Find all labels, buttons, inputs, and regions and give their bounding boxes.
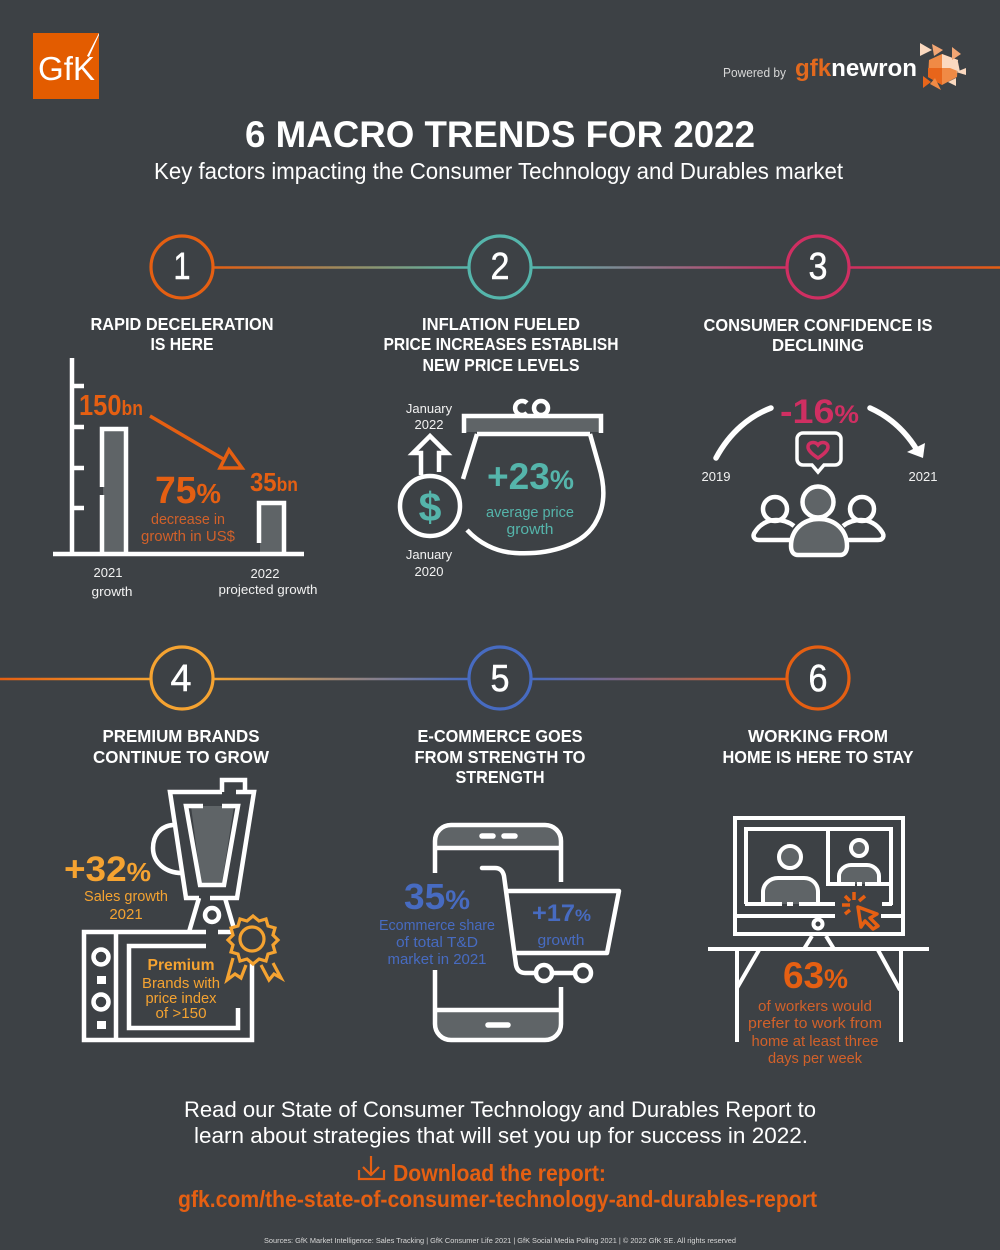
icon: purse with dollar coin: January xyxy=(406,547,453,562)
heading 3: CONSUMER CONFIDENCE IS xyxy=(704,315,932,335)
title: 6 MACRO TRENDS FOR 2022 xyxy=(245,114,755,155)
text: premium definition: of >150 xyxy=(156,1005,206,1022)
icon: purse with dollar coin: average price xyxy=(486,504,574,521)
icon: purse with dollar coin: 2022 xyxy=(415,417,443,432)
number badge 3: 3 xyxy=(808,246,828,288)
icon: confidence arc and people: 2021 xyxy=(909,469,937,484)
number badge 1 xyxy=(151,236,213,298)
icon: purse with dollar coin xyxy=(400,401,603,579)
heading 3: DECLINING xyxy=(772,335,864,355)
text: premium definition: Brands with xyxy=(142,975,220,992)
heading 5 xyxy=(414,726,586,787)
call to action text xyxy=(184,1097,816,1148)
text: workers statistic: days per week xyxy=(768,1050,862,1067)
heading 1: IS HERE xyxy=(150,334,214,354)
panel: trend 3 consumer confidence xyxy=(702,236,937,555)
bar chart: 150bn xyxy=(79,390,143,422)
number badge 2: 2 xyxy=(490,246,510,288)
bar chart: 2022 xyxy=(251,566,279,581)
text: ecommerce growth xyxy=(532,900,591,949)
heading 2 xyxy=(384,314,618,375)
number badge 6: 6 xyxy=(808,658,828,700)
icon: shopping cart xyxy=(482,868,619,981)
panel: trend 4 premium brands xyxy=(64,647,281,1040)
heading 6: WORKING FROM xyxy=(748,726,888,746)
text: ecommerce share: of total T&D xyxy=(396,934,478,951)
text: ecommerce share: 35% xyxy=(404,876,470,917)
bar chart xyxy=(53,358,318,599)
logo: Powered by gfknewron: gfknewron xyxy=(795,55,917,82)
heading 4: CONTINUE TO GROW xyxy=(93,747,269,767)
text: workers statistic: of workers would xyxy=(758,998,872,1015)
heading 6: HOME IS HERE TO STAY xyxy=(722,747,914,767)
text: workers statistic: prefer to work from xyxy=(748,1015,882,1032)
number badge 2 xyxy=(469,236,531,298)
heading 2: INFLATION FUELED xyxy=(422,314,580,334)
heading 1: RAPID DECELERATION xyxy=(90,314,274,334)
heading 2: PRICE INCREASES ESTABLISH xyxy=(384,334,618,354)
number badge 5 xyxy=(469,647,531,709)
text: ecommerce share: Ecommerce share xyxy=(379,917,495,934)
sources footnote: Sources: GfK Market Intelligence: Sales Tracking | GfK Consumer Life 2021 | GfK Social Media Polling 2021 | © 2022 GfK SE. All rights reserved xyxy=(264,1237,736,1245)
icon: purse with dollar coin: 2020 xyxy=(415,564,443,579)
icon: smartphone xyxy=(435,825,561,1040)
call to action text: learn about strategies that will set you up for success in 2022. xyxy=(194,1123,808,1148)
logo: GfK: GfK xyxy=(38,50,95,87)
panel: trend 6 working from home xyxy=(708,647,929,1067)
bar chart: 35bn xyxy=(250,467,298,497)
text: sales growth: Sales growth xyxy=(84,888,168,905)
bar chart: projected growth xyxy=(218,582,318,597)
text: ecommerce share: market in 2021 xyxy=(388,951,486,968)
number badge 5: 5 xyxy=(490,658,510,700)
icon: confidence arc and people: 2019 xyxy=(702,469,730,484)
connector line: row 2 xyxy=(0,678,787,680)
icon: confidence arc and people xyxy=(702,393,937,555)
call to action text: Read our State of Consumer Technology and Durables Report to xyxy=(184,1097,816,1122)
heading 4: PREMIUM BRANDS xyxy=(102,726,260,746)
heading 3 xyxy=(704,315,932,355)
number badge 1: 1 xyxy=(174,246,190,288)
text: workers statistic xyxy=(748,955,882,1067)
heading 4 xyxy=(93,726,269,767)
icon: purse with dollar coin: $ xyxy=(419,484,442,530)
number badge 6 xyxy=(787,647,849,709)
heading 5: FROM STRENGTH TO xyxy=(414,747,586,767)
logo: Powered by gfknewron: Powered by xyxy=(723,66,787,80)
icon: purse with dollar coin: growth xyxy=(506,521,554,538)
logo: Powered by gfknewron xyxy=(723,43,966,90)
bar chart: 2021 xyxy=(94,565,122,580)
number badge 4: 4 xyxy=(170,658,192,700)
download url: gfk.com/the-state-of-consumer-technology-and-durables-report xyxy=(178,1186,817,1212)
icon: monitor on desk xyxy=(708,818,929,1042)
text: ecommerce growth: growth xyxy=(538,932,584,949)
number badge 4 xyxy=(151,647,213,709)
text: sales growth: 2021 xyxy=(109,906,143,923)
bar chart: growth xyxy=(92,584,132,599)
text: premium definition: price index xyxy=(146,990,217,1007)
panel: trend 2 inflation xyxy=(384,236,618,579)
heading 5: E-COMMERCE GOES xyxy=(418,726,582,746)
heading 2: NEW PRICE LEVELS xyxy=(422,355,580,375)
number badge 3 xyxy=(787,236,849,298)
connector line: row 1 xyxy=(213,266,1000,269)
bar chart: 75% xyxy=(155,470,221,512)
icon: blender xyxy=(153,780,254,932)
icon: confidence arc and people: -16% xyxy=(780,393,859,431)
icon: award rosette xyxy=(227,916,281,980)
icon: orange cursor xyxy=(842,892,878,929)
text: workers statistic: home at least three xyxy=(752,1033,878,1050)
icon: download xyxy=(359,1156,384,1179)
bar chart: growth in US$ xyxy=(141,528,236,545)
download heading: Download the report: xyxy=(393,1160,606,1186)
bar chart: decrease in xyxy=(151,511,225,528)
logo: GfK xyxy=(33,33,99,99)
icon: purse with dollar coin: January xyxy=(406,401,453,416)
text: sales growth: +32% xyxy=(64,850,151,889)
text: sales growth xyxy=(64,850,168,923)
icon: purse with dollar coin: +23% xyxy=(487,456,574,497)
heading 5: STRENGTH xyxy=(456,767,544,787)
text: ecommerce share xyxy=(379,876,495,968)
icon: appliance base xyxy=(84,932,252,1040)
text: premium definition: Premium xyxy=(148,957,214,974)
text: workers statistic: 63% xyxy=(783,955,848,996)
subtitle: Key factors impacting the Consumer Technology and Durables market xyxy=(154,158,844,184)
text: ecommerce growth: +17% xyxy=(532,900,591,927)
heading 1 xyxy=(90,314,274,354)
heading 6 xyxy=(722,726,914,767)
text: premium definition xyxy=(142,957,220,1022)
panel: trend 5 e-commerce xyxy=(379,647,619,1040)
panel: trend 1 rapid deceleration xyxy=(53,236,318,599)
